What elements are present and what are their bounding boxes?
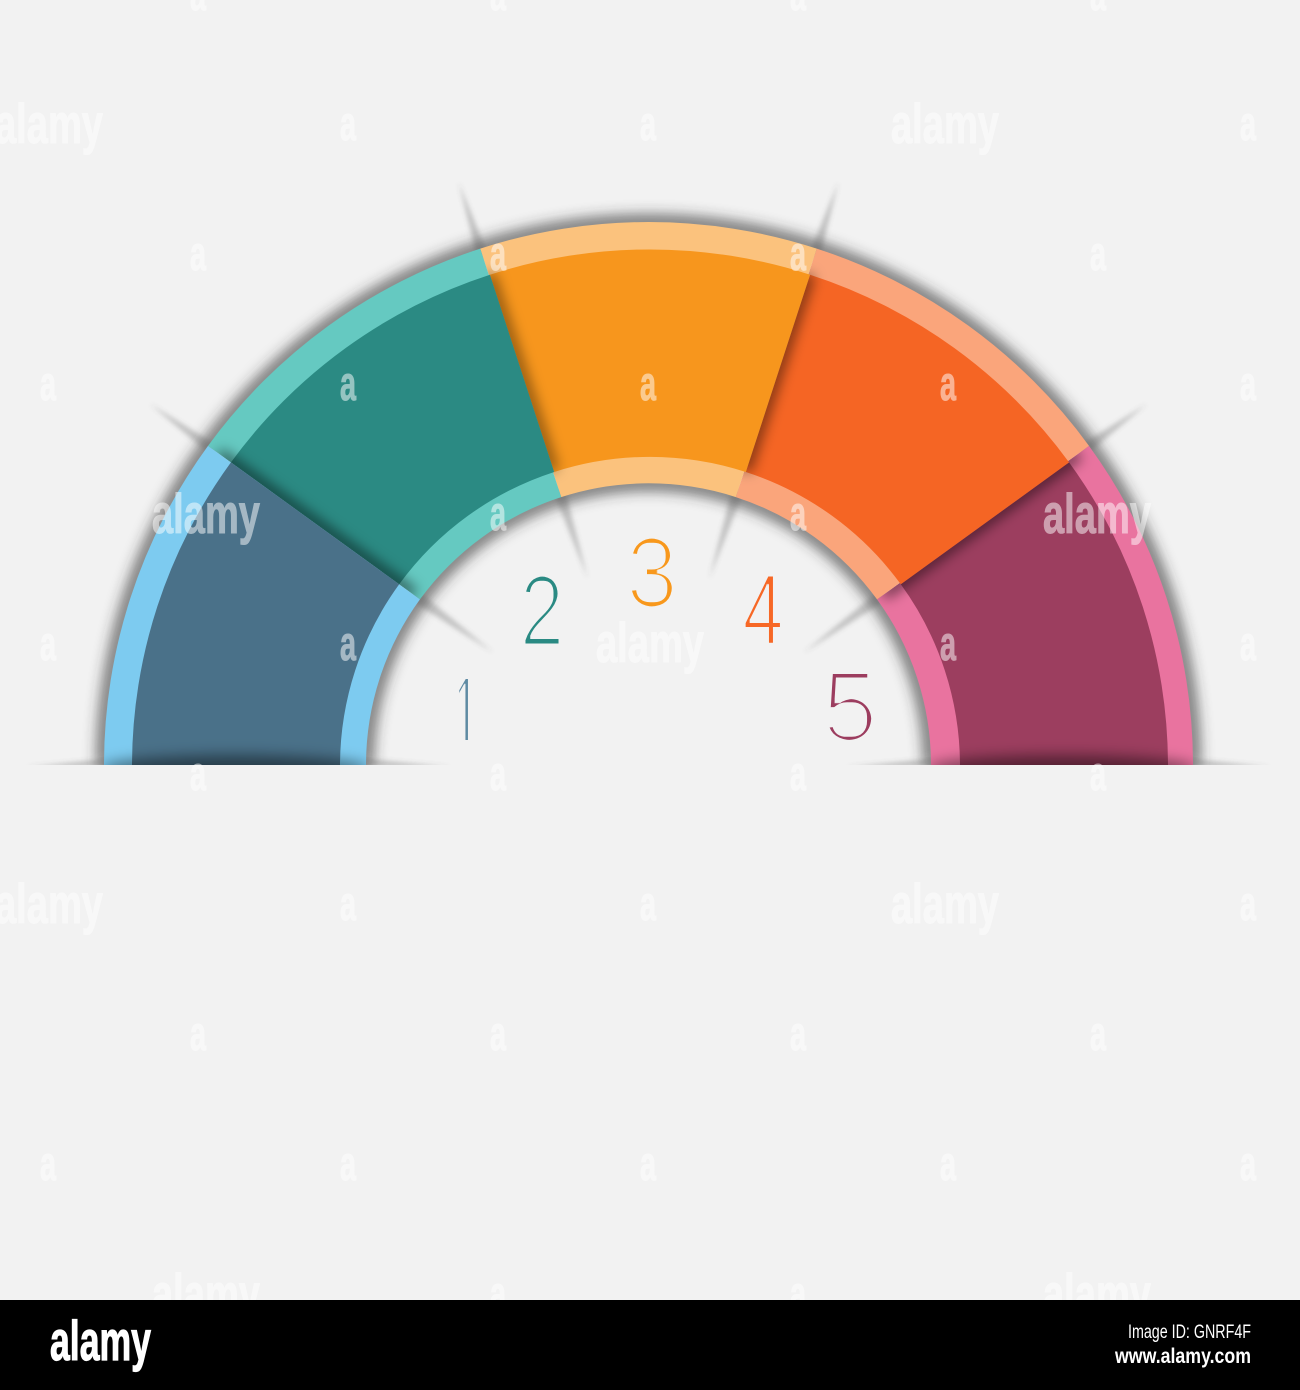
- segment 1: [104, 446, 420, 766]
- watermarks: a: [790, 1268, 807, 1321]
- tapered spikes: [26, 181, 1270, 767]
- lower blank sheet: [0, 765, 1300, 1300]
- watermarks: a: [40, 618, 57, 671]
- watermarks: alamy: [1043, 1262, 1151, 1325]
- watermarks: a: [790, 748, 807, 801]
- watermarks: a: [490, 488, 507, 541]
- image id: Image ID: GNRF4F: [1128, 1322, 1251, 1343]
- watermarks: a: [340, 1138, 357, 1191]
- watermarks: a: [1090, 1008, 1107, 1061]
- watermarks: alamy: [891, 92, 999, 155]
- segment 4: [736, 249, 1089, 599]
- watermarks: a: [790, 488, 807, 541]
- watermarks: a: [190, 748, 207, 801]
- watermarks: a: [1240, 98, 1257, 151]
- number 5: 5: [822, 651, 878, 763]
- watermarks: a: [1240, 618, 1257, 671]
- watermarks: a: [190, 1008, 207, 1061]
- watermarks: a: [640, 878, 657, 931]
- watermarks: alamy: [596, 611, 704, 674]
- watermarks: alamy: [152, 1262, 260, 1325]
- footer bar: [0, 1300, 1300, 1390]
- watermarks: a: [490, 1268, 507, 1321]
- watermarks: alamy: [1043, 482, 1151, 545]
- watermarks: a: [640, 358, 657, 411]
- watermarks: alamy: [152, 482, 260, 545]
- text: 1: [455, 656, 477, 768]
- watermarks: a: [1090, 228, 1107, 281]
- watermarks: a: [340, 878, 357, 931]
- watermarks: a: [40, 1138, 57, 1191]
- watermarks: a: [940, 1138, 957, 1191]
- watermarks: a: [490, 1008, 507, 1061]
- footer logo: alamy: [50, 1309, 151, 1372]
- watermarks: a: [1240, 1138, 1257, 1191]
- watermarks: a: [1240, 358, 1257, 411]
- segment 5: [877, 446, 1193, 766]
- watermarks: a: [790, 1008, 807, 1061]
- watermarks: a: [640, 1138, 657, 1191]
- watermarks: a: [790, 228, 807, 281]
- number 4: 4: [743, 554, 783, 666]
- arc drop shadows: [104, 222, 1193, 765]
- watermarks: a: [490, 748, 507, 801]
- semicircle chart: [26, 181, 1270, 783]
- watermarks: a: [1240, 878, 1257, 931]
- watermarks: alamy: [891, 872, 999, 935]
- watermarks: a: [940, 358, 957, 411]
- watermarks: a: [340, 358, 357, 411]
- segment 3: [480, 222, 817, 497]
- watermarks: a: [40, 358, 57, 411]
- watermarks: a: [940, 618, 957, 671]
- watermarks: a: [190, 228, 207, 281]
- website: www.alamy.com: [1114, 1345, 1251, 1368]
- watermarks: a: [640, 98, 657, 151]
- watermarks: a: [490, 228, 507, 281]
- baseline shading: [98, 747, 1200, 765]
- segment 2: [208, 249, 561, 599]
- watermarks: a: [340, 98, 357, 151]
- number 2: 2: [520, 555, 564, 667]
- watermarks: a: [1090, 748, 1107, 801]
- number 3: 3: [626, 517, 678, 629]
- watermarks: a: [340, 618, 357, 671]
